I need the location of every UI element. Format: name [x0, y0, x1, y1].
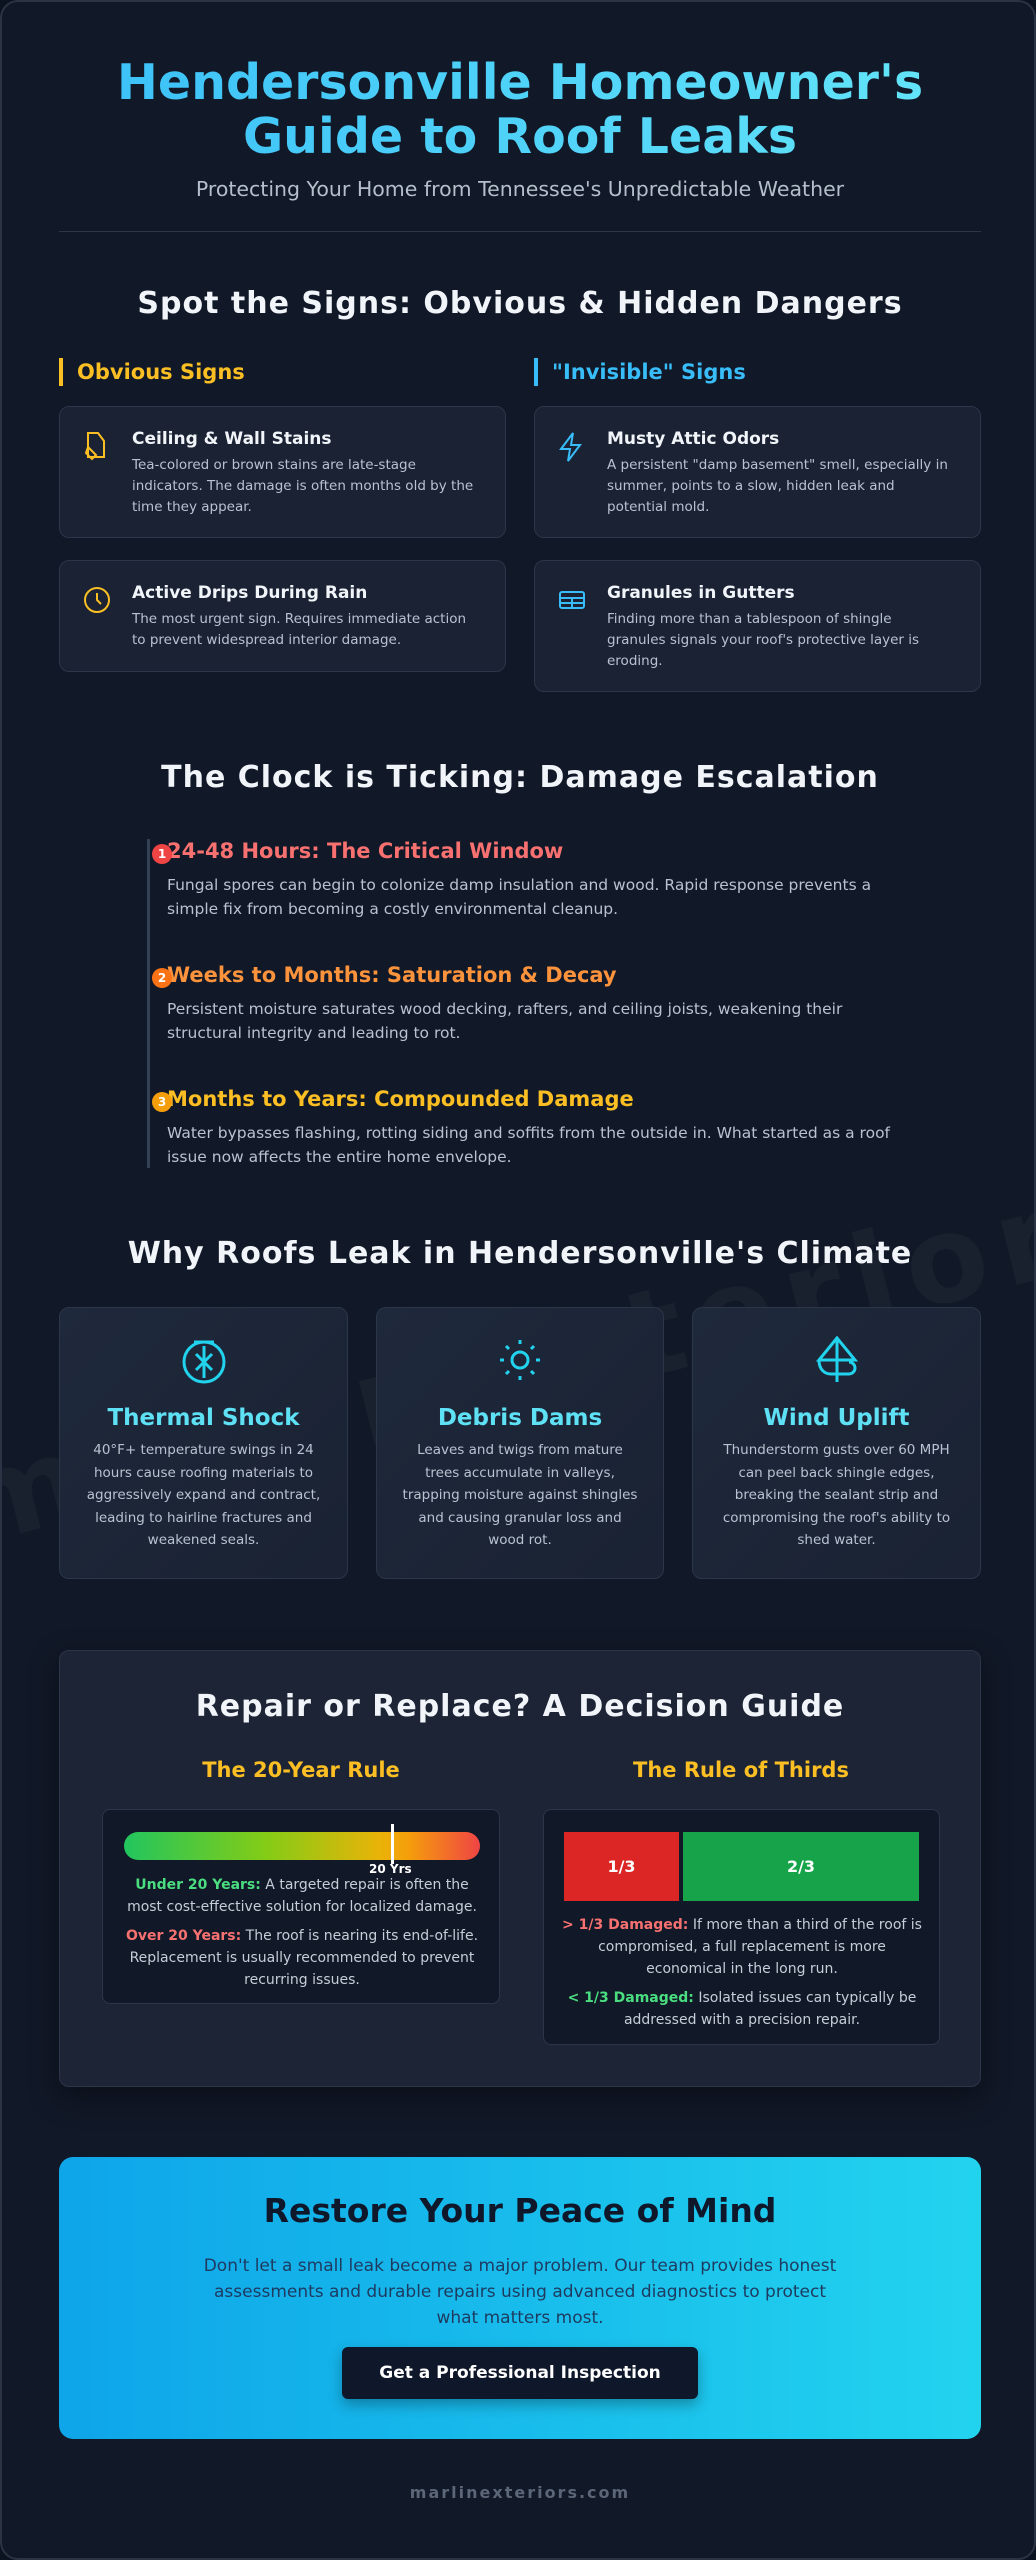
heading: clock is ticking: The Clock is Ticking: Damage Escalation: [161, 760, 879, 795]
icon: sun: [500, 1340, 540, 1380]
badge 3: 3: [158, 1095, 166, 1109]
subheading: invisible signs: "Invisible" Signs: [552, 360, 746, 384]
text: under/over: Over 20 Years: The roof is nearing its end-of-life. Replacement is usually recommended to prevent recurring issues.: [126, 1928, 478, 1988]
card: debris dams: Debris Dams: [438, 1405, 602, 1431]
badge 1: [152, 844, 172, 864]
icon: stain: [84, 432, 105, 460]
text: thirds: [562, 1917, 922, 2028]
marker: 20 yrs: [391, 1824, 394, 1864]
panel: decision guide: [59, 1650, 981, 2087]
heading: repair or replace: Repair or Replace? A Decision Guide: [196, 1689, 844, 1724]
subheading: rule of thirds: The Rule of Thirds: [633, 1758, 849, 1782]
card: granules: granules signals your roof's protective layer is eroding.: [607, 632, 919, 669]
step 3: Water bypasses flashing, rotting siding and soffits from the outside in. What started as a roof: [167, 1124, 890, 1142]
step 2: Weeks to Months: Saturation & Decay: [167, 963, 617, 987]
card: musty odors: [534, 406, 981, 538]
step 3: [167, 1087, 890, 1166]
card: ceiling stains: Tea-colored or brown stains are late-stage indicators. The damage is often months old by the time they appear.: [132, 457, 473, 515]
badge 2: 2: [158, 971, 166, 985]
bar: 1/3: 1/3: [607, 1857, 636, 1876]
card: debris dams: Leaves and twigs from mature trees accumulate in valleys, trapping moisture against shingles and causing granular loss and wood rot.: [403, 1442, 637, 1548]
card: active drips: Active Drips During Rain: [132, 583, 367, 603]
cta text: Don't let a small leak become a major problem. Our team provides honest assessments and durable repairs using advanced diagnostics to protect what matters most.: [204, 2256, 836, 2328]
footer: marlinexteriors.com: [410, 2483, 630, 2502]
card: active drips: The most urgent sign. Requires immediate action to prevent widespread interior damage.: [132, 611, 466, 648]
card: thermal shock: [59, 1307, 348, 1579]
card: musty odors: Musty Attic Odors: [607, 429, 779, 449]
card: granules: Granules in Gutters: [607, 583, 795, 603]
text: thirds: > 1/3 Damaged: If more than a third of the roof is compromised, a full replacement is more economical in the long run.: [562, 1917, 922, 1977]
cta heading: Restore Your Peace of Mind: [264, 2191, 776, 2230]
step 3: Months to Years: Compounded Damage: [167, 1087, 634, 1111]
bar: 1/3: [564, 1832, 679, 1901]
timeline: [147, 839, 890, 1168]
badge 2: [152, 968, 172, 988]
step 1: 24-48 Hours: The Critical Window: [167, 839, 563, 863]
card: musty odors: A persistent "damp basement" smell, especially in summer, points to a slow, hidden leak and potential mold.: [607, 457, 948, 515]
icon: bolt: [559, 432, 582, 462]
subtitle: Protecting Your Home from Tennessee's Unpredictable Weather: [196, 177, 844, 201]
step 2: Persistent moisture saturates wood decking, rafters, and ceiling joists, weakening their structural integrity and leading to rot.: [167, 1000, 842, 1042]
icon: thermal: [182, 1340, 226, 1384]
card: granules: [534, 560, 981, 692]
cta button: [342, 2347, 698, 2399]
box: 20-year gauge: 20 Yrs: [369, 1862, 412, 1876]
badge 3: [152, 1092, 172, 1112]
card: debris dams: [376, 1307, 664, 1579]
card: granules: Finding more than a tablespoon of shingle: [607, 611, 892, 627]
cta button: Get a Professional Inspection: [379, 2363, 661, 2383]
card: wind uplift: Thunderstorm gusts over 60 MPH can peel back shingle edges, breaking the sealant strip and compromising the roof's ability to shed water.: [723, 1442, 950, 1548]
card: thermal shock: Thermal Shock: [107, 1405, 300, 1431]
text: thirds: < 1/3 Damaged: Isolated issues can typically be addressed with a precision repair.: [568, 1990, 916, 2028]
step 1: [167, 839, 871, 918]
box: rule of thirds: [543, 1809, 940, 2045]
bar: 2/3: 2/3: [787, 1857, 815, 1876]
step 2: [167, 963, 842, 1042]
card: thermal shock: 40°F+ temperature swings in 24 hours cause roofing materials to aggressively expand and contract, leading to hairline fractures and weakened seals.: [87, 1442, 320, 1548]
subheading: 20-year rule: The 20-Year Rule: [202, 1758, 400, 1782]
gauge bar: [124, 1832, 480, 1860]
title: Hendersonville Homeowner's: [117, 54, 923, 111]
icon: clock: [84, 587, 110, 613]
card: wind uplift: Wind Uplift: [763, 1405, 910, 1431]
card: active drips: [59, 560, 506, 672]
card: ceiling stains: Ceiling & Wall Stains: [132, 429, 332, 449]
panel: call to action: [59, 2157, 981, 2439]
icon: wind: [816, 1336, 858, 1382]
heading: why roofs leak: Why Roofs Leak in Hendersonville's Climate: [128, 1236, 912, 1271]
icon: gutter: [559, 591, 585, 609]
subheading: obvious signs: Obvious Signs: [77, 360, 245, 384]
card: wind uplift: [692, 1307, 981, 1579]
step 1: Fungal spores can begin to colonize damp insulation and wood. Rapid response prevents a simple fix from becoming a costly environmental cleanup.: [167, 876, 871, 918]
box: 20-year gauge: [102, 1809, 500, 2004]
step 3: issue now affects the entire home envelope.: [167, 1148, 512, 1166]
text: under/over: [126, 1877, 478, 1988]
card: ceiling stains: [59, 406, 506, 538]
bar: 2/3: [683, 1832, 919, 1901]
badge 1: 1: [158, 847, 166, 861]
text: under/over: Under 20 Years: A targeted repair is often the most cost-effective solution for localized damage.: [127, 1877, 477, 1915]
title: Guide to Roof Leaks: [243, 108, 797, 165]
title: [117, 54, 923, 165]
heading: spot the signs: Spot the Signs: Obvious & Hidden Dangers: [137, 286, 903, 321]
